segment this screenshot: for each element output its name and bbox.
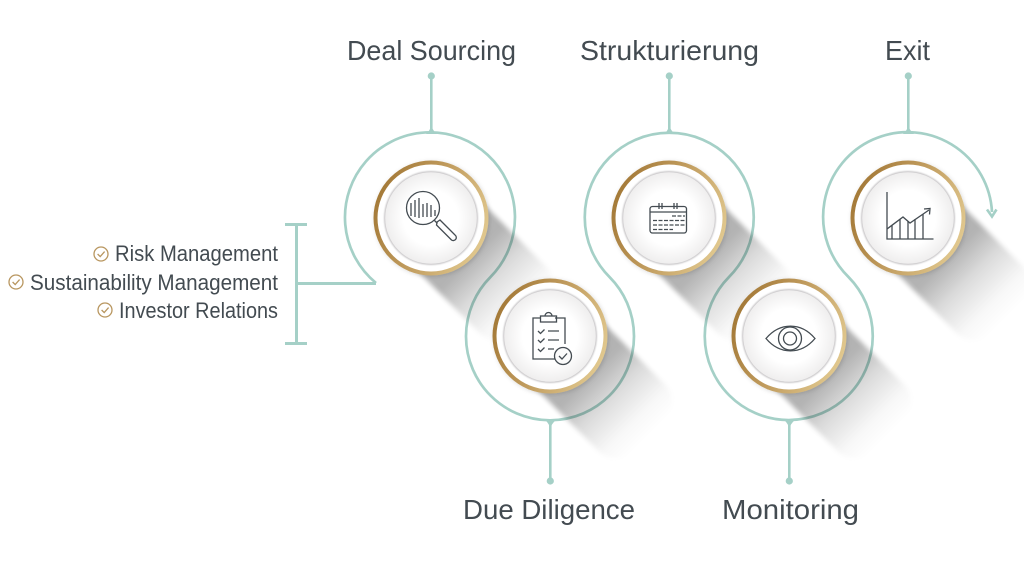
disc: Due Diligence	[492, 278, 608, 394]
connector: Exit	[903, 72, 914, 134]
teal process line	[345, 132, 997, 420]
disc: Exit	[850, 160, 966, 276]
heading: Due Diligence: Due Diligence	[463, 494, 635, 525]
text: Investor Relations: Investor Relations	[119, 298, 278, 323]
connector: Deal Sourcing	[426, 72, 437, 134]
icon: magnifier with bars	[406, 192, 456, 241]
text: Sustainability Management: Sustainability Management	[30, 270, 278, 295]
connector: Monitoring	[784, 420, 795, 485]
icon: clipboard with check	[533, 313, 572, 364]
bracket	[285, 223, 376, 345]
heading: Exit: Exit	[885, 35, 930, 66]
long shadow 3	[636, 185, 801, 350]
disc: Deal Sourcing	[374, 160, 488, 276]
icon: eye	[766, 326, 815, 351]
disc: Strukturierung	[612, 160, 726, 276]
icon: calendar	[650, 203, 686, 233]
heading: Monitoring: Monitoring	[722, 494, 859, 525]
long shadow 1	[398, 185, 563, 350]
list: cross-functional topics	[9, 241, 278, 323]
heading: Deal Sourcing: Deal Sourcing	[347, 35, 516, 66]
connector: Strukturierung	[664, 72, 675, 134]
text: Risk Management: Risk Management	[115, 241, 278, 266]
icon: growth chart	[887, 192, 934, 239]
check icon: investor	[98, 303, 112, 317]
disc: Monitoring	[732, 278, 846, 394]
check icon: risk	[94, 247, 108, 261]
heading: Strukturierung: Strukturierung	[580, 35, 759, 66]
long shadow 5	[875, 185, 1024, 350]
check icon: sustainability	[9, 275, 23, 289]
connector: Due Diligence	[545, 420, 556, 485]
long shadow 2	[517, 303, 682, 468]
long shadow 4	[756, 303, 921, 468]
